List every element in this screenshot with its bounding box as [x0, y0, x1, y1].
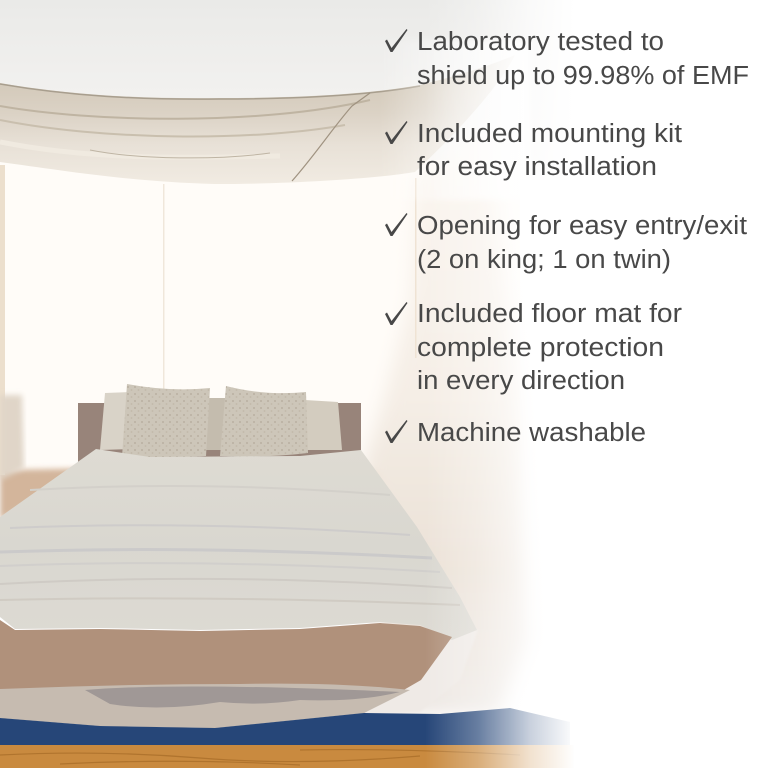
white fade over the right side [380, 0, 768, 768]
wood floor behind the bed [0, 468, 440, 540]
feature: floor mat: in every direction [417, 367, 625, 395]
feature: opening [385, 212, 747, 274]
wood floor foreground [0, 745, 600, 768]
feature: mounting kit: for easy installation [417, 153, 657, 181]
feature: opening: Opening for easy entry/exit [417, 212, 747, 240]
feature: mounting kit: Included mounting kit [417, 120, 682, 148]
pillows [100, 384, 342, 458]
mattress side [0, 620, 452, 728]
feature: EMF shielding: Laboratory tested to [417, 28, 664, 56]
headboard [78, 403, 361, 465]
feature: opening: (2 on king; 1 on twin) [417, 246, 671, 274]
duvet [0, 449, 477, 640]
feature list [385, 28, 749, 447]
photo: canopy bed scene [0, 55, 600, 768]
blue floor mat [0, 708, 570, 747]
feature: EMF shielding [385, 28, 749, 90]
bright wall inside the canopy [0, 160, 520, 480]
bed net lower right [340, 625, 478, 716]
feature: floor mat [385, 300, 683, 395]
feature: EMF shielding: shield up to 99.98% of EMF [417, 62, 749, 90]
feature: floor mat: complete protection [417, 334, 664, 362]
feature: mounting kit [385, 120, 682, 181]
feature: floor mat: Included floor mat for [417, 300, 683, 328]
feature: machine washable: Machine washable [417, 419, 646, 447]
side netting [0, 130, 530, 715]
hanging canopy top [0, 55, 515, 184]
